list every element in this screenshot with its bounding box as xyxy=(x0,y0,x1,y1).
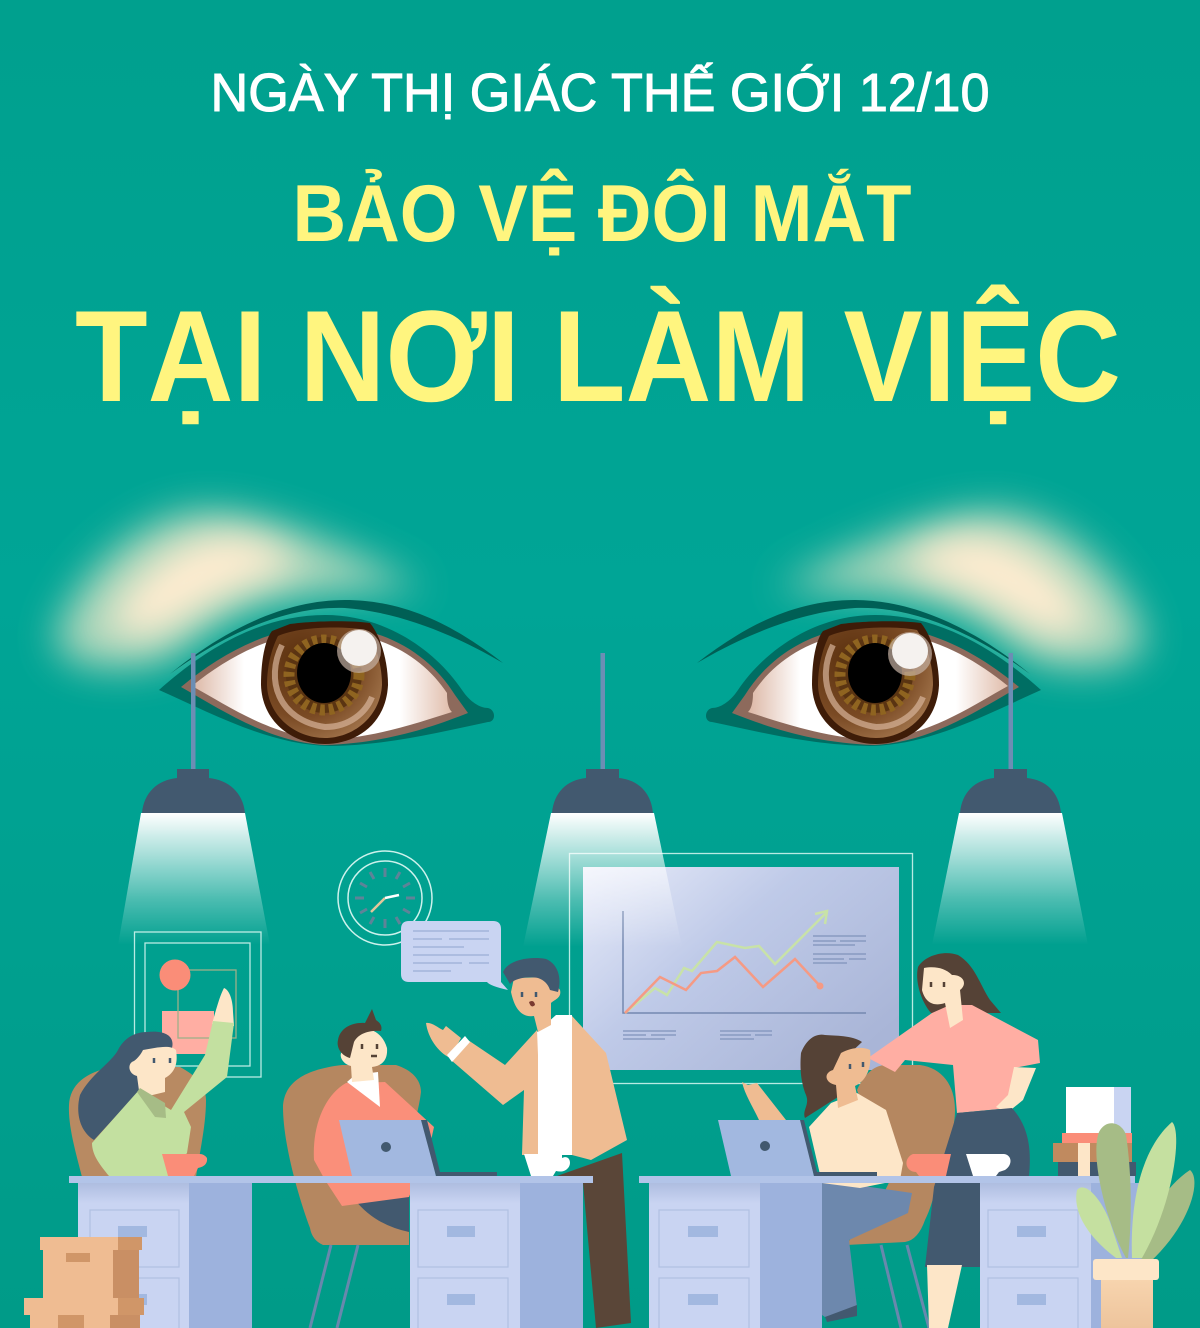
eyes xyxy=(931,982,944,987)
eyes xyxy=(850,1062,863,1069)
paper and book stack xyxy=(1053,1087,1136,1176)
eyelid and lash line xyxy=(159,615,494,746)
desk left xyxy=(78,1183,583,1328)
hair xyxy=(917,953,1001,1013)
wall picture xyxy=(134,932,261,1077)
mouth xyxy=(529,1001,535,1006)
desk right top xyxy=(639,1176,1135,1183)
chair left xyxy=(69,1067,206,1177)
line chart xyxy=(623,911,866,1039)
hand xyxy=(742,1082,786,1120)
laptop xyxy=(718,1120,877,1176)
jacket and arm xyxy=(451,1016,627,1160)
eyelid and lash line xyxy=(706,615,1041,746)
neck and face xyxy=(341,1029,387,1082)
white shirt xyxy=(522,1015,576,1155)
speech bubble xyxy=(401,921,508,990)
sclera xyxy=(192,632,452,740)
cuff xyxy=(447,1036,470,1062)
collar xyxy=(137,1088,166,1118)
right eyebrow xyxy=(775,511,1145,668)
desk right xyxy=(649,1183,1153,1328)
hair xyxy=(503,958,560,992)
face xyxy=(129,1047,177,1098)
skirt xyxy=(925,1108,1030,1267)
coral and white cups on desk xyxy=(906,1154,1011,1176)
pot xyxy=(1101,1280,1153,1328)
upper eyelid crease xyxy=(697,600,1030,674)
lower lid skin xyxy=(181,626,468,745)
cardboard boxes xyxy=(24,1237,144,1328)
iris xyxy=(812,621,939,744)
standing man talking xyxy=(426,958,627,1160)
forearm xyxy=(996,1067,1036,1113)
seated man with laptop xyxy=(314,1009,497,1232)
chair centre xyxy=(283,1065,421,1328)
wall clock xyxy=(338,851,432,945)
hair xyxy=(338,1009,381,1058)
sclera xyxy=(748,632,1008,740)
collar xyxy=(347,1072,380,1107)
iris xyxy=(261,621,388,744)
heading: Tại nơi làm việc: TẠI NƠI LÀM VIỆC xyxy=(75,283,1121,429)
hair xyxy=(801,1035,862,1118)
leaves xyxy=(1140,1170,1194,1262)
face and neck xyxy=(922,967,964,1028)
standing man trousers xyxy=(557,1153,631,1328)
woman with raised hand xyxy=(78,988,234,1176)
hand xyxy=(426,1023,461,1058)
lower lid skin xyxy=(732,626,1019,745)
lamp right xyxy=(932,653,1088,945)
laptop xyxy=(339,1120,497,1176)
blouse xyxy=(868,1005,1040,1113)
presentation board xyxy=(570,854,912,1084)
seated woman with laptop xyxy=(718,1035,912,1322)
hair xyxy=(78,1032,173,1140)
chair right xyxy=(846,1065,955,1328)
neck and face xyxy=(511,977,560,1032)
title: Ngày Thị giác Thế giới: NGÀY THỊ GIÁC THẾ GIỚI 12/10 xyxy=(210,63,990,123)
lamp left xyxy=(118,653,270,945)
left eye xyxy=(159,600,503,746)
raised hand xyxy=(212,988,234,1026)
potted plant xyxy=(1076,1122,1194,1328)
upper eyelid crease xyxy=(170,600,503,674)
sweater xyxy=(314,1082,434,1206)
eyes xyxy=(522,992,536,997)
face xyxy=(827,1048,870,1108)
coral cup xyxy=(162,1154,207,1176)
standing woman xyxy=(868,953,1040,1328)
desk left top and second cup xyxy=(69,1154,593,1183)
left eyebrow xyxy=(55,511,425,668)
shirt xyxy=(92,1021,234,1176)
heading: Bảo vệ đôi mắt: BẢO VỆ ĐÔI MẮT xyxy=(292,168,912,259)
leg xyxy=(927,1265,962,1328)
lamp centre xyxy=(523,653,682,947)
right eye xyxy=(697,600,1041,746)
jeans xyxy=(822,1180,912,1317)
trousers xyxy=(355,1190,409,1232)
eyes and mouth xyxy=(362,1044,377,1056)
eyes xyxy=(154,1058,170,1063)
blouse xyxy=(809,1093,903,1188)
